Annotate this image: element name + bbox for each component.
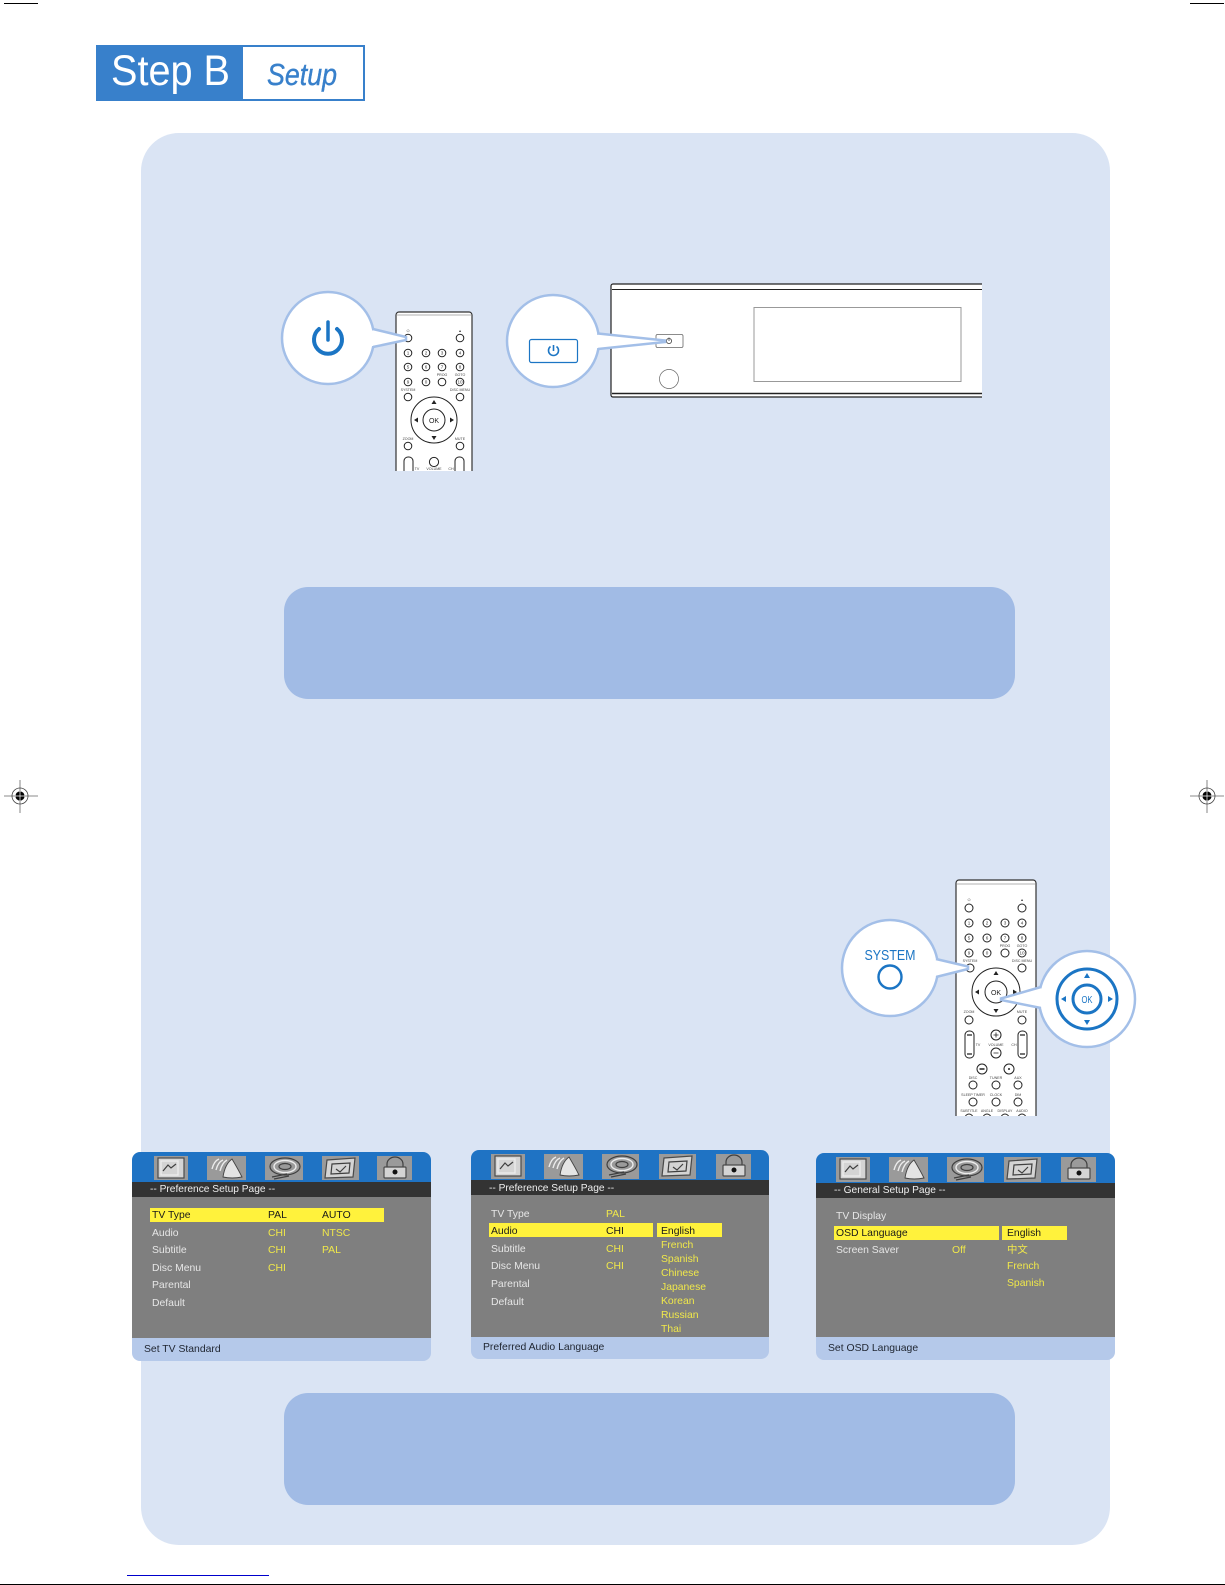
remote control bottom: DISC MENU (1012, 959, 1032, 963)
menu text: Audio (491, 1226, 518, 1237)
remote control bottom: SYSTEM (963, 959, 977, 963)
remote control top: 0 (425, 380, 428, 385)
callout: remote power button (282, 292, 406, 384)
remote control bottom: 8 (1021, 936, 1024, 941)
remote control top: 9 (407, 380, 410, 385)
menu text: French (661, 1240, 694, 1251)
menu text: CHI (268, 1245, 286, 1256)
menu text: Parental (491, 1279, 530, 1290)
remote control bottom: AUX (1014, 1076, 1022, 1080)
title: Step B Setup (96, 45, 365, 101)
menu text: Subtitle (491, 1244, 526, 1255)
remote control bottom: 6 (986, 936, 989, 941)
remote control top: CH (448, 467, 454, 471)
menu text: 中文 (1007, 1243, 1028, 1256)
remote control bottom: TUNER (990, 1076, 1003, 1080)
menu text: OSD Language (836, 1228, 908, 1239)
remote control bottom: OK (991, 990, 1001, 997)
remote control top: 8 (459, 365, 462, 370)
remote control bottom: 0 (986, 951, 989, 956)
icon: picture frame (322, 1156, 359, 1180)
menu text: Japanese (661, 1282, 706, 1293)
remote control top: OK (429, 418, 439, 425)
menu text: Spanish (1007, 1278, 1045, 1289)
remote control top: PROG (437, 373, 447, 377)
menu text: Subtitle (152, 1245, 187, 1256)
menu text: English (1007, 1228, 1041, 1239)
icon: film reel (947, 1157, 984, 1182)
menu text: PAL (606, 1209, 625, 1220)
remote control bottom: TV (976, 1043, 981, 1047)
remote control bottom: DISPLAY (998, 1109, 1013, 1113)
remote control top (396, 312, 472, 487)
menu text: -- Preference Setup Page -- (150, 1184, 275, 1195)
menu text: Spanish (661, 1254, 699, 1265)
remote control bottom: AUDIO (1016, 1109, 1028, 1113)
screen: Audio language menu (471, 1150, 769, 1359)
remote control top: TV (415, 467, 420, 471)
menu text: NTSC (322, 1228, 351, 1239)
remote control top: DISC MENU (450, 388, 470, 392)
menu text: PAL (268, 1210, 287, 1221)
menu text: CHI (606, 1244, 624, 1255)
remote control bottom: DISC (969, 1076, 978, 1080)
remote control bottom: 1 (968, 921, 971, 926)
registration mark left (4, 780, 38, 813)
icon: picture (154, 1156, 188, 1180)
icon: lock (1061, 1157, 1096, 1182)
menu text: Chinese (661, 1268, 699, 1279)
icon: speaker (207, 1156, 246, 1180)
remote control bottom: DIM (1015, 1093, 1021, 1097)
menu text: Preferred Audio Language (483, 1342, 605, 1353)
menu text: Set OSD Language (828, 1343, 918, 1354)
remote control bottom: ANGLE (981, 1109, 994, 1113)
icon: picture (491, 1154, 525, 1179)
menu text: TV Type (152, 1210, 191, 1221)
menu text: Thai (661, 1324, 681, 1335)
menu text: Default (491, 1297, 524, 1308)
callout: device power button (507, 295, 665, 387)
remote control bottom: ▲ (1020, 898, 1024, 902)
remote control top: 4 (459, 351, 462, 356)
registration mark right (1190, 780, 1224, 813)
callout box: bottom note (284, 1393, 1015, 1505)
icon: picture frame (1004, 1157, 1041, 1182)
menu text: -- Preference Setup Page -- (489, 1183, 614, 1194)
menu text: Disc Menu (152, 1263, 201, 1274)
menu text: Off (952, 1245, 966, 1256)
remote control bottom: 4 (1021, 921, 1024, 926)
remote control top: 7 (441, 365, 444, 370)
title: Step B Setup: Setup (267, 57, 337, 92)
title: Step B Setup: Step B (111, 47, 230, 95)
remote control top: 10 (457, 380, 463, 385)
menu text: -- General Setup Page -- (834, 1185, 946, 1196)
icon: speaker (889, 1157, 928, 1182)
menu text: Set TV Standard (144, 1344, 221, 1355)
icon: film reel (602, 1154, 639, 1179)
remote control top: 2 (425, 351, 428, 356)
icon: picture frame (659, 1154, 696, 1179)
remote control bottom: GOTO (1017, 944, 1027, 948)
menu text: TV Display (836, 1211, 887, 1222)
icon: speaker (544, 1154, 583, 1179)
menu text: PAL (322, 1245, 341, 1256)
remote control bottom: CH (1011, 1043, 1017, 1047)
panel: setup background (141, 133, 1110, 1545)
remote control top: 5 (407, 365, 410, 370)
remote control top: SYSTEM (401, 388, 415, 392)
menu text: CHI (268, 1228, 286, 1239)
menu text (144, 1184, 384, 1355)
callout: SYSTEM button (842, 920, 968, 1016)
remote control bottom: MUTE (1017, 1010, 1028, 1014)
menu text: Parental (152, 1280, 191, 1291)
remote control bottom: 7 (1004, 936, 1007, 941)
remote control bottom: ⏻ (968, 898, 971, 902)
remote control top: 1 (407, 351, 410, 356)
menu text: Korean (661, 1296, 695, 1307)
remote control bottom: VOLUME (988, 1043, 1004, 1047)
menu text: Russian (661, 1310, 699, 1321)
callout: OK navigation pad: OK (1082, 994, 1092, 1006)
callout: SYSTEM button: SYSTEM (864, 947, 916, 964)
menu text (483, 1183, 722, 1353)
remote control bottom: 2 (986, 921, 989, 926)
remote control bottom: SLEEP TIMER (961, 1093, 985, 1097)
remote control bottom: 10 (1019, 951, 1025, 956)
remote control bottom: PROG (1000, 944, 1010, 948)
remote control top: MUTE (455, 437, 466, 441)
remote control top: 6 (425, 365, 428, 370)
menu text: Screen Saver (836, 1245, 899, 1256)
menu text: Disc Menu (491, 1261, 540, 1272)
menu text: French (1007, 1261, 1040, 1272)
menu text: English (661, 1226, 695, 1237)
remote control bottom (956, 880, 1036, 1140)
remote control top: ⏻ (407, 329, 410, 333)
remote control bottom: ZOOM (964, 1010, 974, 1014)
remote control top: 3 (441, 351, 444, 356)
icon: film reel (265, 1156, 303, 1180)
remote control top: GOTO (455, 373, 465, 377)
remote control top: VOLUME (426, 467, 442, 471)
menu text: CHI (606, 1261, 624, 1272)
remote control bottom: 3 (1004, 921, 1007, 926)
menu text: AUTO (322, 1210, 351, 1221)
remote control top: ZOOM (403, 437, 413, 441)
menu text: CHI (268, 1263, 286, 1274)
callout box: top note (284, 587, 1015, 699)
remote control bottom: CLOCK (990, 1093, 1003, 1097)
screen: OSD language menu (816, 1153, 1115, 1360)
menu text: Audio (152, 1228, 179, 1239)
icon: picture (836, 1157, 870, 1182)
menu text: Default (152, 1298, 185, 1309)
menu text (828, 1185, 1067, 1354)
screen: TV Type menu (132, 1152, 431, 1361)
menu text: TV Type (491, 1209, 530, 1220)
remote control bottom: SUBTITLE (960, 1109, 978, 1113)
icon: lock (377, 1156, 412, 1180)
remote control bottom: 9 (968, 951, 971, 956)
callout: OK navigation pad (1001, 951, 1135, 1047)
icon: lock (716, 1154, 751, 1179)
device front panel (611, 284, 1011, 397)
remote control top: ▲ (458, 329, 462, 333)
menu text: CHI (606, 1226, 624, 1237)
remote control bottom: 5 (968, 936, 971, 941)
